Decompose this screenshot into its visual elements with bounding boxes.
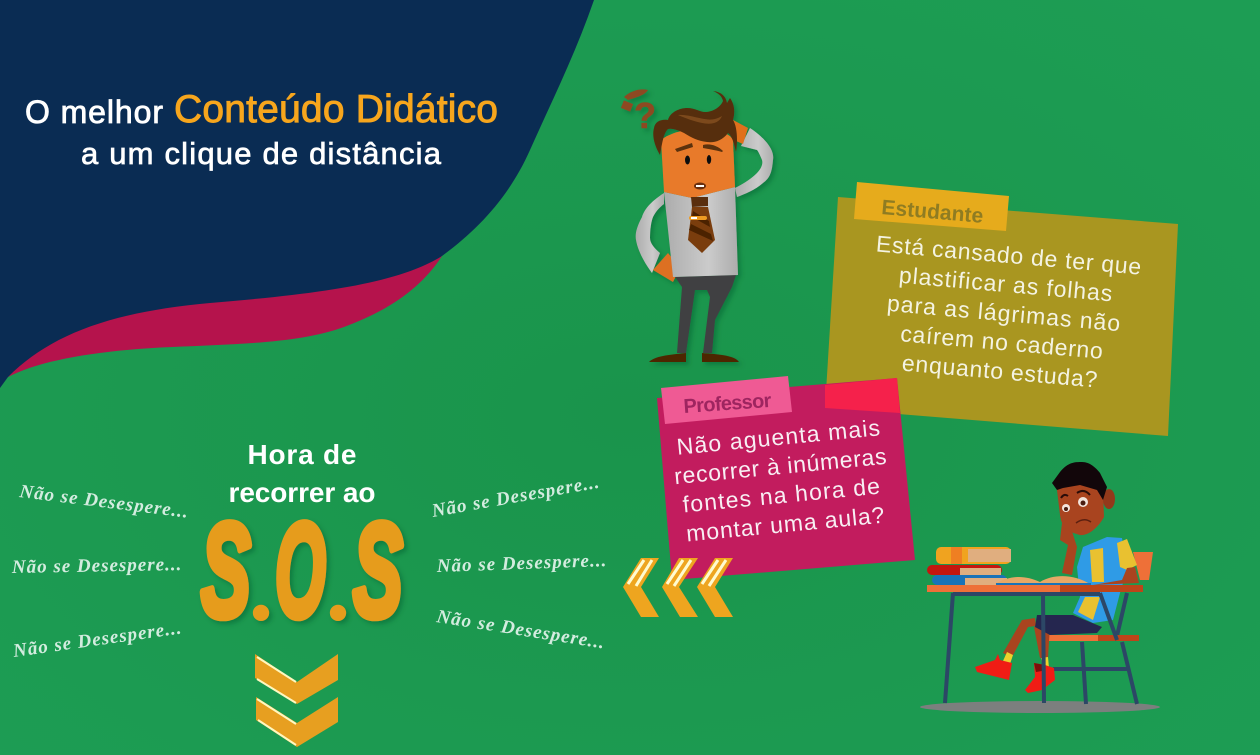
heading: S.O.S (201, 495, 403, 645)
text: Estudante question: plastificar as folhas (898, 262, 1113, 306)
tie (691, 197, 708, 207)
shorts (1035, 615, 1102, 635)
arrows: pointing down (255, 654, 338, 747)
eyes (1078, 497, 1088, 507)
text: Estudante question: Está cansado de ter que (875, 230, 1142, 280)
heading: S.O.S: S (201, 495, 251, 644)
text: Professor question: Não aguenta mais (675, 414, 881, 460)
text: Professor question: fontes na hora de (681, 473, 881, 517)
floor shadow (920, 701, 1160, 713)
repeated phrases: left: Não se Desespere... (17, 481, 190, 523)
shoes (975, 654, 1012, 680)
panel: Estudante (825, 182, 1178, 436)
repeated phrases: left (11, 481, 190, 662)
repeated phrases: right: Não se Desespere... (435, 550, 608, 577)
illustration: confused man (621, 89, 773, 362)
heading: Hora de recorrer ao: Hora de (248, 439, 356, 470)
face (675, 143, 693, 152)
repeated phrases: left: Não se Desespere... (11, 554, 182, 578)
tab: Professor: Professor (683, 390, 772, 418)
text: Estudante question: caírem no caderno (899, 320, 1104, 364)
text: Professor question: montar uma aula? (685, 502, 886, 547)
tab: Estudante: Estudante (881, 196, 984, 228)
title (25, 88, 498, 171)
hair (1052, 462, 1107, 500)
raised arm (735, 128, 773, 197)
books (927, 547, 1091, 585)
arrows: pointing left (623, 558, 733, 617)
legs (675, 275, 736, 353)
repeated phrases: left: Não se Desespere... (11, 617, 183, 662)
chair (1045, 552, 1153, 704)
lower arm (636, 193, 664, 273)
tab: Professor (661, 376, 792, 424)
heading: S.O.S: . (250, 542, 272, 639)
head (661, 129, 735, 198)
text: Professor question (673, 414, 887, 547)
title: a um clique de distância (81, 136, 442, 171)
text: Estudante question: enquanto estuda? (901, 350, 1098, 393)
panel: Professor (657, 376, 915, 580)
title: O melhor (25, 94, 163, 130)
icon: question mark: ? (634, 95, 656, 136)
text: Estudante question (875, 230, 1142, 393)
heading: S.O.S: . (327, 542, 349, 639)
heading: Hora de recorrer ao: recorrer ao (228, 477, 376, 508)
desk (927, 585, 1143, 703)
text: Professor question: recorrer à inúmeras (673, 443, 887, 489)
repeated phrases: right (429, 472, 608, 654)
illustration: bored student at desk (920, 462, 1160, 713)
hand (653, 253, 680, 282)
title: Conteúdo Didático (174, 88, 498, 131)
hair (653, 91, 737, 155)
repeated phrases: right: Não se Desespere... (434, 606, 607, 654)
torso (664, 187, 738, 277)
student torso (1073, 537, 1139, 623)
background shape: navy wave (0, 0, 594, 388)
heading: S.O.S: O (275, 497, 326, 645)
heading: S.O.S: S (353, 495, 403, 644)
student legs (975, 615, 1102, 693)
text: Estudante question: para as lágrimas não (886, 290, 1121, 336)
repeated phrases: right: Não se Desespere... (429, 472, 602, 522)
student head and arm (1052, 462, 1115, 575)
background shape: crimson wave (8, 200, 442, 377)
shoes (649, 353, 686, 362)
icon: question mark (621, 89, 656, 136)
heading: Hora de recorrer ao (228, 439, 376, 508)
tab: Estudante (854, 182, 1009, 231)
